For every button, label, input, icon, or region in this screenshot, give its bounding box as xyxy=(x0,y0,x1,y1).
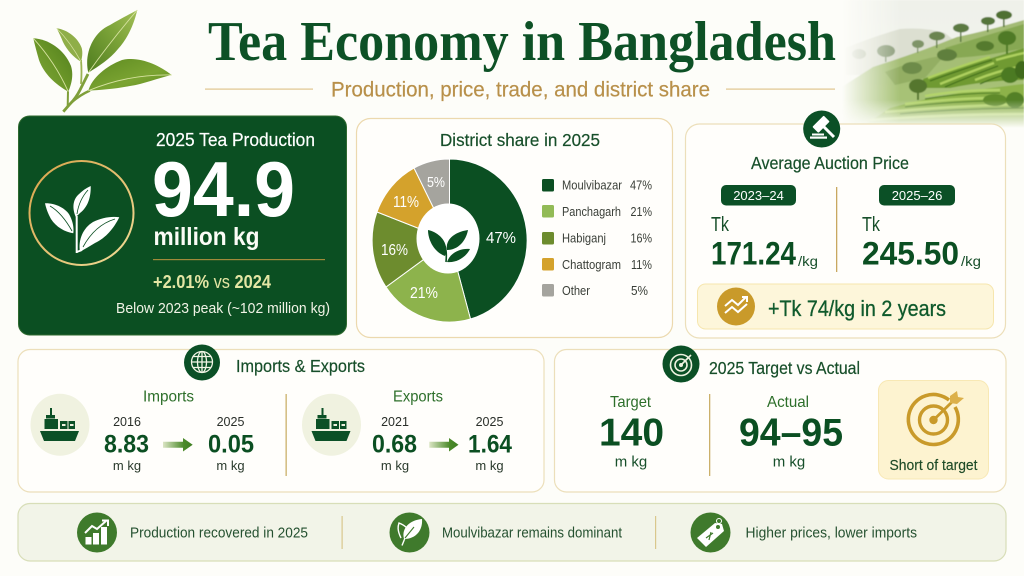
icon: ship xyxy=(30,394,90,456)
donut chart xyxy=(372,159,527,322)
icon: gavel xyxy=(803,110,840,148)
price 2025-26: 245.50 xyxy=(862,236,959,272)
legend xyxy=(542,178,652,298)
price 2023-24: Tk xyxy=(711,214,730,236)
legend: 47% xyxy=(630,178,652,192)
callout: short of target xyxy=(878,380,988,479)
illustration: tea leaves sprig xyxy=(33,10,172,112)
target value: m kg xyxy=(615,454,647,470)
legend: Habiganj xyxy=(562,232,606,246)
icon: sprout in gold ring xyxy=(30,161,134,265)
heading: imports and exports: Imports & Exports xyxy=(236,356,365,376)
icon: ship xyxy=(302,394,361,456)
imports block: 2016 xyxy=(113,415,141,429)
takeaway: moulvibazar dominant xyxy=(390,512,622,552)
unit: million kg xyxy=(154,223,260,251)
arrow xyxy=(163,438,193,452)
takeaway: production recovered xyxy=(77,512,308,552)
price 2025-26 xyxy=(862,185,981,272)
actual value xyxy=(739,394,843,470)
exports block xyxy=(302,388,512,473)
donut chart: 11% xyxy=(393,194,419,211)
heading: target vs actual: 2025 Target vs Actual xyxy=(709,358,860,378)
callout: price gain: +Tk 74/kg in 2 years xyxy=(768,296,946,321)
target value: 140 xyxy=(599,412,664,455)
legend: 21% xyxy=(630,205,652,219)
target value: Target xyxy=(610,394,652,411)
price 2025-26: /kg xyxy=(961,253,981,269)
price 2025-26: 2025–26 xyxy=(892,188,942,203)
big number: 94.9 xyxy=(152,145,295,233)
exports block: 0.68 xyxy=(372,431,417,459)
subtitle: Production, price, trade, and district share xyxy=(331,78,710,102)
legend: 5% xyxy=(631,284,648,298)
imports block: 8.83 xyxy=(104,431,149,459)
legend: Other xyxy=(562,284,590,298)
imports block: m kg xyxy=(113,458,141,473)
icon: target xyxy=(662,346,700,382)
trees xyxy=(852,10,1024,108)
heading: average auction price: Average Auction Price xyxy=(751,153,909,173)
exports block: Exports xyxy=(393,388,443,406)
callout: price gain xyxy=(698,284,994,329)
panel: target vs actual xyxy=(554,346,1006,492)
exports block: 2025 xyxy=(476,415,503,429)
imports block: m kg xyxy=(216,458,245,473)
exports block: 1.64 xyxy=(468,431,512,459)
legend: 11% xyxy=(631,258,652,272)
icon: donut centre leaf xyxy=(428,230,470,262)
target value xyxy=(599,394,664,470)
terrace band A xyxy=(923,48,1024,88)
exports block: m kg xyxy=(475,458,504,473)
arrow xyxy=(429,438,458,452)
price 2023-24: /kg xyxy=(798,253,818,269)
legend: Chattogram xyxy=(562,258,621,272)
panel: average auction price xyxy=(686,110,1006,338)
peak note: Below 2023 peak (~102 million kg) xyxy=(116,300,330,317)
imports block: 2025 xyxy=(217,415,244,429)
takeaway: higher prices xyxy=(690,512,917,552)
panel: imports and exports xyxy=(18,344,544,492)
title: Tea Economy in Bangladesh xyxy=(208,11,836,73)
legend: Moulvibazar xyxy=(562,178,622,192)
takeaway: production recovered: Production recovered in 2025 xyxy=(130,526,308,542)
illustration: tea plantation hillside xyxy=(846,0,1024,127)
actual value: Actual xyxy=(767,394,809,411)
panel: key takeaways xyxy=(18,504,1006,561)
price 2023-24: 2023–24 xyxy=(733,188,784,203)
callout: short of target: Short of target xyxy=(890,457,978,474)
upper slope shading xyxy=(945,24,1024,58)
donut chart: 5% xyxy=(427,174,445,191)
icon: globe xyxy=(184,344,220,380)
imports block xyxy=(30,388,254,473)
panel: district share xyxy=(356,118,672,338)
heading: 2025 tea production: 2025 Tea Production xyxy=(156,129,315,150)
legend: 16% xyxy=(630,232,652,246)
price 2025-26: Tk xyxy=(862,214,881,236)
donut chart: 47% xyxy=(486,230,516,247)
terrace band B xyxy=(878,84,1024,122)
change vs 2024: +2.01% vs 2024 xyxy=(153,272,271,292)
actual value: 94–95 xyxy=(739,412,843,455)
panel: 2025 tea production xyxy=(18,116,346,335)
exports block: m kg xyxy=(381,458,409,473)
imports block: 0.05 xyxy=(208,431,254,459)
exports block: 2021 xyxy=(381,415,409,429)
legend: Panchagarh xyxy=(562,205,621,219)
price 2023-24: 171.24 xyxy=(711,236,796,272)
takeaway: higher prices: Higher prices, lower imports xyxy=(746,526,917,542)
imports block: Imports xyxy=(143,388,194,406)
heading: district share: District share in 2025 xyxy=(440,130,600,150)
donut chart: 16% xyxy=(381,242,408,259)
takeaway: moulvibazar dominant: Moulvibazar remains dominant xyxy=(442,526,622,542)
actual value: m kg xyxy=(773,454,805,470)
price 2023-24 xyxy=(711,185,818,272)
donut chart: 21% xyxy=(410,285,438,302)
